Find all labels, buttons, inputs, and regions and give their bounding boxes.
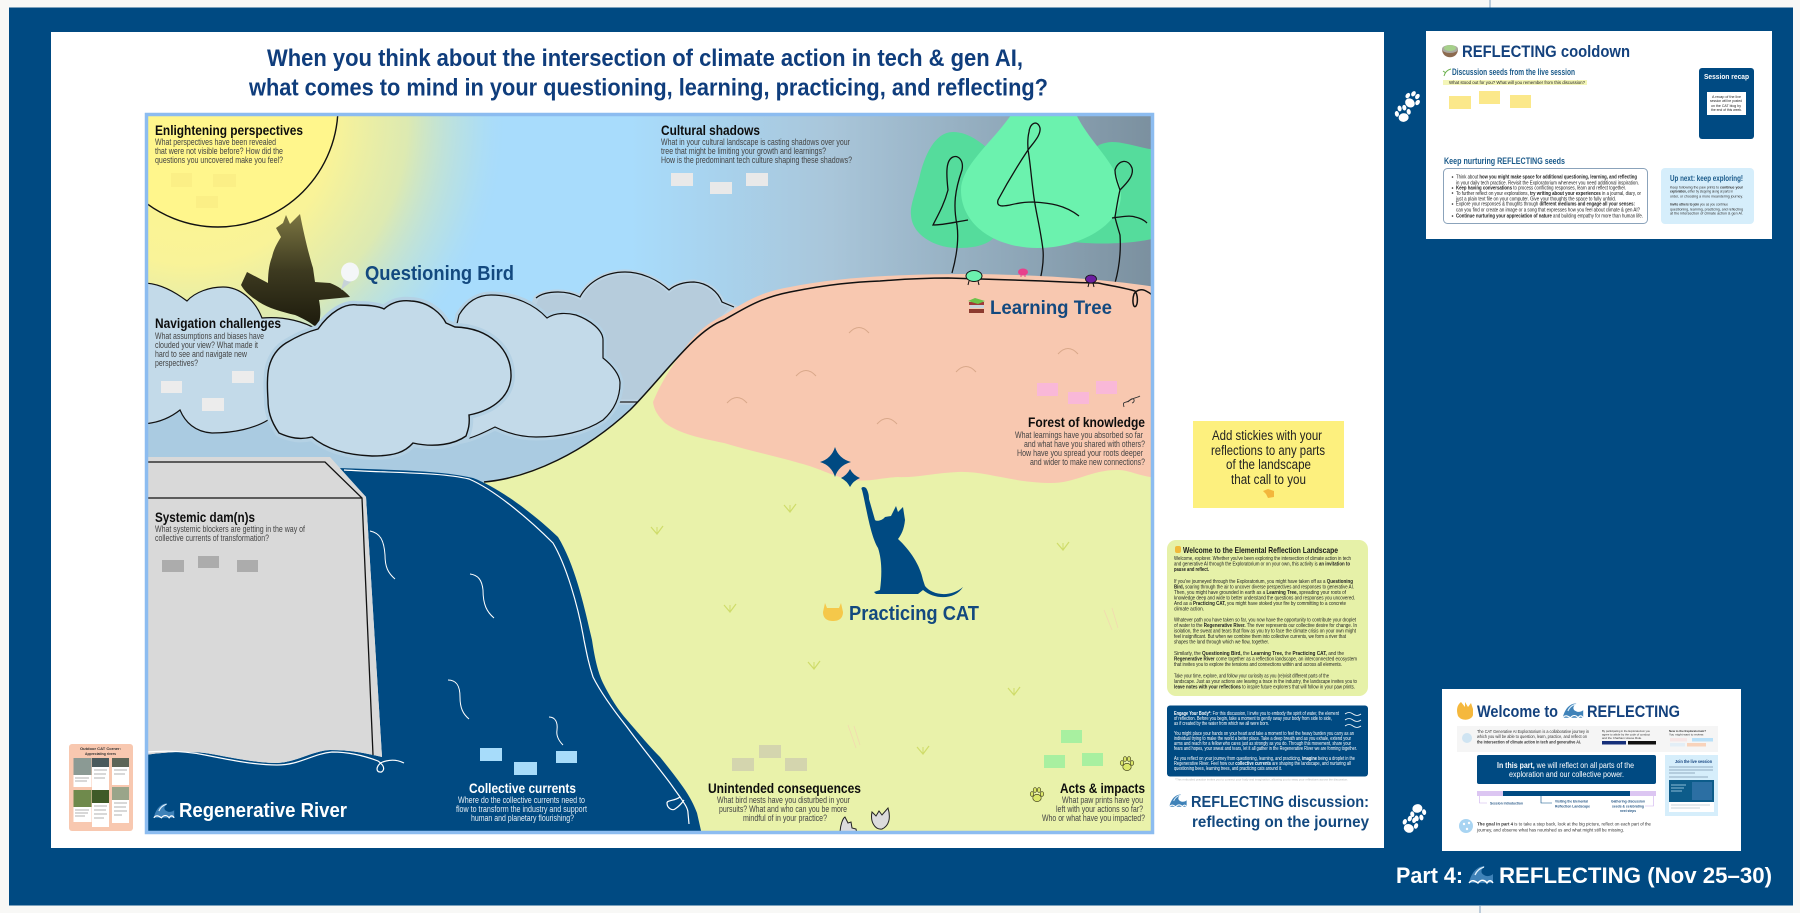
trees [910, 116, 1151, 282]
intro strip: The CAT Generative AI Exploratorium is a collaborative journey in [1477, 729, 1590, 734]
sun [148, 116, 338, 228]
panel: welcome to the elemental reflection landscape: Regenerative River come together as a reflection landscape, an interconnected ecosystem [1174, 656, 1357, 662]
region text: systemic dams: What systemic blockers are getting in the way of [155, 524, 305, 534]
panel: welcome to the elemental reflection landscape [1167, 540, 1368, 696]
sticky note: instructions: that call to you [1231, 472, 1306, 487]
intro strip: New to the Exploratorium? [1669, 729, 1706, 733]
region text: navigation challenges: perspectives? [155, 358, 198, 368]
up next card: Keep following the paw prints to continue your [1670, 185, 1743, 189]
river white lines and currents [147, 470, 689, 824]
icon: waving hand [1457, 702, 1473, 720]
worm squiggle [1123, 396, 1140, 407]
sticky note: instructions: reflections to any parts [1211, 443, 1325, 458]
up next card: Up next: keep exploring! [1670, 174, 1743, 183]
region text: cultural shadows: Cultural shadows [661, 123, 760, 138]
panel: welcome to the elemental reflection landscape: Similarly, the Questioning Bird, the Learning Tree, the Practicing CAT, and the [1174, 651, 1344, 657]
panel: welcome to the elemental reflection landscape: feel insignificant. But when we combine them into collective currents, we form a river that [1174, 634, 1346, 640]
region text: collective currents: Where do the collective currents need to [458, 795, 585, 805]
up next card: exploration, either by stepping along at parts in [1670, 190, 1733, 194]
intro strip [1457, 726, 1718, 752]
poster thumbnail: outdoor CAT corner: Outdoor CAT Corner: [80, 747, 121, 751]
region text: acts and impacts: What paw prints have you [1062, 795, 1143, 805]
panel: engage your body: Regenerative River. Feel how our collective currents are shaping the landscape, and nurturing all [1174, 761, 1351, 767]
region text: enlightening perspectives [155, 123, 303, 208]
sticky note: instructions [1193, 421, 1344, 508]
river [140, 468, 702, 835]
agenda timeline [1477, 791, 1656, 813]
label: practicing cat: Practicing CAT [849, 603, 979, 625]
sticky note: instructions: Add stickies with your [1212, 428, 1322, 443]
region text: collective currents: flow to transform the industry and support [456, 804, 587, 814]
goal statement: The goal in part 4 is to take a step back, look at the big picture, reflect on each part of the [1477, 822, 1651, 826]
region text: forest of knowledge [1015, 381, 1145, 467]
region text: cultural shadows: How is the predominant tech culture shaping these shadows? [661, 155, 852, 165]
panel: engage your body [1167, 706, 1368, 776]
dam [140, 457, 382, 763]
panel: reflecting cooldown [1426, 31, 1772, 239]
region text: enlightening perspectives: What perspectives have been revealed [155, 137, 276, 147]
panel: welcome to the elemental reflection landscape: pause and reflect. [1174, 567, 1209, 573]
panel: welcome to the elemental reflection landscape: landscape. Just as your actions are leaving a trace in the industry, the landscape invites you to [1174, 679, 1357, 685]
keep nurturing list: Think about how you might make space for additional questioning, learning, and reflecting [1456, 175, 1637, 181]
region text: cultural shadows: tree that might be limiting your growth and learnings? [661, 146, 826, 156]
join the live session sidebar: Join the live session [1675, 759, 1712, 764]
region text: navigation challenges: What assumptions and biases have [155, 331, 264, 341]
up next card: Invite others to join you as you continue [1670, 202, 1728, 206]
panel: engage your body: questioning bees, learning trees, and practicing cats around it. [1174, 766, 1282, 772]
region text: enlightening perspectives: questions you uncovered make you feel? [155, 155, 283, 165]
heading: welcome: REFLECTING [1587, 702, 1680, 721]
region text: forest of knowledge: How have you spread your roots deeper [1017, 448, 1143, 458]
region text: cultural shadows: What in your cultural landscape is casting shadows over your [661, 137, 850, 147]
region text: forest of knowledge: Forest of knowledge [1028, 415, 1145, 430]
keep nurturing list: can you find or create an image or a song that expresses how you feel about climate & gen AI? [1456, 208, 1640, 214]
panel: welcome to the elemental reflection landscape: isolation, the sweat and tears that flow as you try to face the climate crisis on your own might [1174, 628, 1356, 634]
up next card: questioning, learning, practicing, and reflecting [1670, 207, 1743, 211]
heading: welcome [1477, 702, 1680, 721]
region text: collective currents: Collective currents [469, 781, 576, 796]
agenda timeline: Visiting the Elemental [1555, 800, 1588, 804]
footnote: *This embodied practice invites you to connect your body and imagination, allowing you to sway your reflections across the discussion. [1175, 778, 1348, 782]
region text: navigation challenges: clouded your view? What made it [155, 340, 258, 350]
region text: collective currents: human and planetary flourishing? [471, 813, 574, 823]
panel: welcome to the elemental reflection landscape: and generative AI through the Exploratorium or on your own, this activity is an invitation to [1174, 562, 1351, 568]
panel: engage your body: You might place your hands on your heart and take a moment to feel the heavy burden you carry as an [1174, 731, 1354, 737]
keep nurturing list: Continue nurturing your appreciation of nature and building empathy for more than human life. [1456, 214, 1643, 220]
title: what comes to mind in your questioning, learning, practicing, and reflecting? [248, 74, 1048, 102]
up next card: order, or choosing a more meandering journey. [1670, 194, 1743, 198]
region text: forest of knowledge: What learnings have you absorbed so far [1015, 430, 1143, 440]
sticky note: instructions: of the landscape [1226, 457, 1311, 472]
intro strip: and the Chatham House Rule. [1602, 736, 1642, 740]
region text: unintended consequences [708, 745, 861, 823]
cat silhouette [861, 487, 963, 597]
main white panel [51, 32, 1384, 848]
keep nurturing list [1444, 168, 1648, 224]
agenda timeline: next steps [1620, 809, 1636, 813]
region text: acts and impacts [1042, 730, 1145, 823]
label: regenerative river: Regenerative River [179, 800, 347, 822]
region text: forest of knowledge: and what have you shared with others? [1024, 439, 1145, 449]
landscape illustration [144, 112, 1154, 834]
panel: welcome to the elemental reflection landscape: knowledge deep and wide to better understand the questions and responses you uncovered. [1174, 596, 1355, 602]
frame [146, 114, 1152, 832]
heading: welcome: Welcome to [1477, 702, 1558, 721]
session recap card: Session recap [1704, 72, 1749, 81]
region text: cultural shadows [661, 123, 852, 194]
part heading: Part 4: [1396, 863, 1463, 888]
panel: engage your body: fears and hopes, your sweat and tears, let it all gather in the Regenerative River we are forming together. [1174, 746, 1357, 752]
session recap card: the end of this week. [1711, 108, 1742, 112]
region text: enlightening perspectives: Enlightening perspectives [155, 123, 303, 138]
clouds [143, 272, 734, 456]
panel: engage your body: individual trying to make the world a better place. Take a deep breath and as you exhale, extend your [1174, 736, 1351, 742]
panel: welcome to the elemental reflection landscape: And as a Practicing CAT, you might have stoked your fire by committing to a concrete [1174, 601, 1346, 607]
label: learning tree: Learning Tree [990, 298, 1112, 319]
bird silhouette [241, 214, 350, 328]
keep nurturing list: To further reflect on your explorations, try writing about your experiences in a journal, diary, or [1456, 191, 1641, 197]
panel: welcome to the elemental reflection landscape: Welcome, explorer. Whether you've been exploring the intersection of climate action in tech [1174, 556, 1351, 562]
panel: welcome to the elemental reflection landscape: that invites you to explore the tensions and connections within and across all elements. [1174, 662, 1342, 668]
discussion seeds [1443, 67, 1587, 109]
label: questioning bird: Questioning Bird [365, 263, 514, 285]
panel: welcome to the elemental reflection landscape: Whatever path you have taken so far, you now have the opportunity to contribute your droplet [1174, 618, 1356, 624]
region text: acts and impacts: Who or what have you impacted? [1042, 813, 1145, 823]
icon: white paw prints bottom [1400, 803, 1427, 835]
region text: forest of knowledge: and wider to make new connections? [1030, 457, 1145, 467]
region text: unintended consequences: pursuits? What and who can you be more [719, 804, 847, 814]
heading: reflecting discussion [1169, 794, 1369, 831]
hill bumps [727, 328, 1078, 424]
panel: engage your body: Engage Your Body*: For this discussion, I invite you to embody the spirit of water, the element [1174, 711, 1339, 717]
intro strip: You might want to review: [1669, 732, 1704, 736]
panel: welcome to the elemental reflection landscape: Take your time, explore, and follow your curiosity as you (re)visit different parts of the [1174, 674, 1329, 680]
heading: reflecting discussion: reflecting on the journey [1192, 814, 1369, 831]
agenda timeline: seeds & celebrating [1612, 804, 1644, 808]
discussion seeds: What stood out for you? What will you remember from this discussion? [1449, 80, 1585, 86]
panel: engage your body: arms and reach for a fellow who cares just as strongly as you do. Through this movement, share your [1174, 741, 1351, 747]
join the live session sidebar [1665, 755, 1718, 816]
title [248, 45, 1048, 102]
region text: systemic dams: Systemic dam(n)s [155, 510, 255, 525]
agenda timeline: Session introduction [1490, 802, 1523, 806]
in this part banner [1477, 755, 1656, 784]
part heading: REFLECTING (Nov 25–30) [1499, 863, 1772, 888]
panel: welcome to the elemental reflection landscape: Bird, soaring through the air to uncover diverse perspectives and responses to generative AI. [1174, 584, 1354, 590]
panel: welcome to the elemental reflection landscape: Then, you might have grounded in earth as a Learning Tree, spreading your roots of [1174, 590, 1346, 596]
keep nurturing list: just a plain text file on your computer. Give your thoughts the space to fully unfold. [1455, 196, 1616, 202]
keep nurturing list: in your daily tech practice. Revisit the Exploratorium whenever you need additional inspiration. [1456, 180, 1639, 186]
panel: welcome to the elemental reflection landscape: climate action. [1174, 606, 1204, 612]
region text: unintended consequences: Unintended consequences [708, 781, 861, 796]
region text: systemic dams: collective currents of transformation? [155, 533, 269, 543]
green field [483, 360, 1151, 831]
up next card: at the intersection of climate action & gen AI. [1670, 212, 1743, 216]
icon: paw prints on field [1030, 757, 1134, 802]
intro strip: which you will be able to question, learn, practice, and reflect on [1477, 734, 1588, 739]
peach hill [653, 274, 1156, 483]
session recap card: A recap of the live [1712, 95, 1741, 99]
panel: engage your body: As you reflect on your journey from questioning, learning, and practicing, imagine being a droplet in the [1174, 756, 1355, 762]
region text: enlightening perspectives: that were not visible before? How did the [155, 146, 283, 156]
sparkles [820, 447, 860, 487]
panel: engage your body: as if created by the water from which we all were born. [1174, 721, 1269, 727]
region text: collective currents [456, 748, 587, 823]
session recap card: session will be posted [1710, 99, 1742, 103]
icon: white paw prints top [1394, 88, 1424, 123]
heading: reflecting discussion: REFLECTING discussion: [1191, 794, 1369, 811]
in this part banner: exploration and our collective power. [1509, 770, 1624, 779]
session recap card [1699, 68, 1754, 139]
intro strip: the intersection of climate action in tech and generative AI. [1477, 740, 1581, 744]
keep nurturing heading: Keep nurturing REFLECTING seeds [1444, 156, 1565, 166]
agenda timeline: Reflection Landscape [1555, 804, 1590, 808]
panel: welcome to the elemental reflection landscape: Welcome to the Elemental Reflection Landscape [1183, 545, 1338, 555]
icon: pot [1442, 45, 1458, 57]
panel: welcome to the elemental reflection landscape: leave notes with your reflections to inspire future explorers that will follow in your paw prints. [1174, 684, 1355, 690]
poster thumbnail: outdoor CAT corner [69, 744, 133, 831]
region text: navigation challenges: Navigation challenges [155, 316, 281, 331]
region text: navigation challenges [155, 316, 281, 411]
discussion seeds: Discussion seeds from the live session [1452, 67, 1575, 77]
keep nurturing list: Keep having conversations to process conflicting responses, learn and reflect together. [1456, 186, 1626, 192]
panel: welcome to reflecting [1442, 689, 1741, 851]
panel: welcome to the elemental reflection landscape: of water to the Regenerative River. The river represents our collective desire for change. In [1174, 623, 1357, 629]
region text: navigation challenges: hard to see and navigate new [155, 349, 247, 359]
session recap card: on the CAT blog by [1711, 104, 1741, 108]
goal statement [1459, 819, 1651, 833]
grass tufts [651, 504, 1118, 754]
region text: acts and impacts: Acts & impacts [1060, 781, 1145, 796]
up next card [1661, 168, 1754, 224]
region text: acts and impacts: left with your actions so far? [1056, 804, 1143, 814]
region text: unintended consequences: mindful of in your practice? [743, 813, 827, 823]
intro strip: agree to abide by the code of conduct [1602, 732, 1650, 736]
keep nurturing list: Explore your responses & thoughts through different mediums and engage all your senses: [1456, 202, 1635, 208]
agenda timeline: Gathering discussion [1611, 800, 1645, 804]
panel: welcome to the elemental reflection landscape: If you've journeyed through the Exploratorium, you might have taken off as a Questioning [1174, 579, 1353, 585]
region text: systemic dams [155, 510, 305, 572]
mushrooms [966, 268, 1096, 287]
sky [147, 115, 1152, 485]
region text: unintended consequences: What bird nests have you disturbed in your [717, 795, 850, 805]
title: When you think about the intersection of climate action in tech & gen AI, [267, 45, 1023, 72]
eggshells [840, 808, 889, 834]
label: questioning bird [341, 262, 514, 290]
poster thumbnail: outdoor CAT corner: Appreciating rivers [85, 752, 116, 756]
in this part banner: In this part, we will reflect on all parts of the [1497, 761, 1634, 770]
hill outline with loop [484, 278, 1155, 482]
goal statement: journey, and observe what has nourished us and what might still be missing. [1476, 828, 1624, 832]
panel: engage your body: of reflection. Before you begin, take a moment to gently sway your body from side to side, [1174, 716, 1332, 722]
intro strip: By participating in the Exploratorium you [1602, 729, 1650, 733]
panel: welcome to the elemental reflection landscape: shapes the land through which we flow, together. [1174, 640, 1269, 646]
heading: cooldown: REFLECTING cooldown [1462, 42, 1630, 61]
